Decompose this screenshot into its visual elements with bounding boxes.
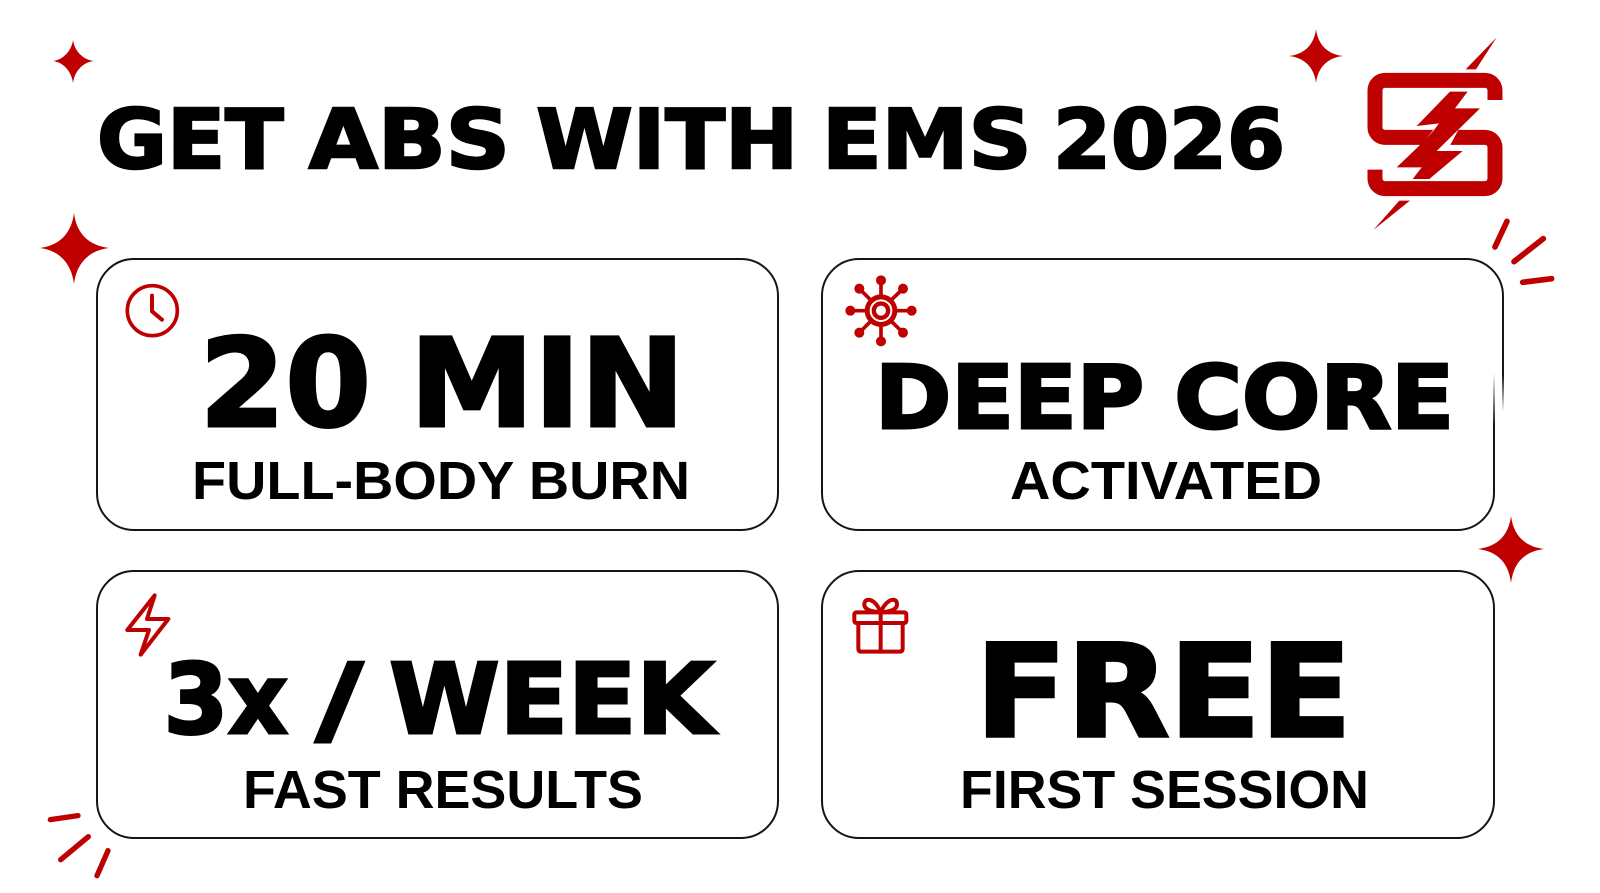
title: 2026 <box>1053 93 1285 188</box>
title: GET <box>97 93 284 188</box>
card edge fade: upper <box>1502 375 1504 412</box>
heading: 20 MIN <box>200 313 685 455</box>
card outline <box>822 259 1503 530</box>
subheading: first session: FIRST SESSION <box>960 760 1369 820</box>
panel: free first session <box>822 571 1494 838</box>
heading: 3x / WEEK: / <box>316 643 364 756</box>
title: ABS <box>309 93 510 188</box>
panel: deep core <box>822 259 1503 530</box>
heading: DEEP CORE <box>875 347 1454 449</box>
sparkle star: right <box>1478 516 1544 583</box>
panel: 3x per week <box>97 571 778 838</box>
sparkle star: top right <box>1289 29 1343 83</box>
card outline <box>97 571 778 838</box>
heading: 3x / WEEK <box>164 643 718 756</box>
heading: 3x / WEEK: 3x <box>164 643 288 756</box>
card outline <box>822 571 1494 838</box>
heading: DEEP CORE: DEEP <box>875 347 1144 449</box>
sparkle star: left <box>40 213 109 284</box>
heading: DEEP CORE: CORE <box>1174 347 1454 449</box>
heading: 20 MIN: 20 <box>200 313 371 455</box>
subheading: fast results: FAST RESULTS <box>243 760 643 820</box>
icon: clock <box>127 286 177 336</box>
accent rays: top right <box>1495 221 1552 282</box>
icon: core target <box>845 275 917 346</box>
title: WITH <box>536 93 798 188</box>
title <box>97 93 1285 188</box>
panel: 20 min <box>97 259 778 530</box>
card outline <box>97 259 778 530</box>
card edge fade: lower <box>1493 373 1495 425</box>
icon: gift box <box>854 600 906 652</box>
card background <box>822 259 1503 530</box>
title: EMS <box>822 93 1032 188</box>
subheading: full-body burn: FULL-BODY BURN <box>192 451 690 511</box>
icon: lightning bolt <box>127 595 168 655</box>
heading: 20 MIN: MIN <box>410 313 685 455</box>
heading: FREE: FREE <box>976 618 1352 767</box>
logo: S with lightning bolt <box>1373 37 1497 230</box>
accent rays: bottom left <box>50 816 108 876</box>
heading: 3x / WEEK: WEEK <box>389 643 718 756</box>
subheading: activated: ACTIVATED <box>1010 451 1322 511</box>
sparkle star: top left <box>53 40 94 83</box>
